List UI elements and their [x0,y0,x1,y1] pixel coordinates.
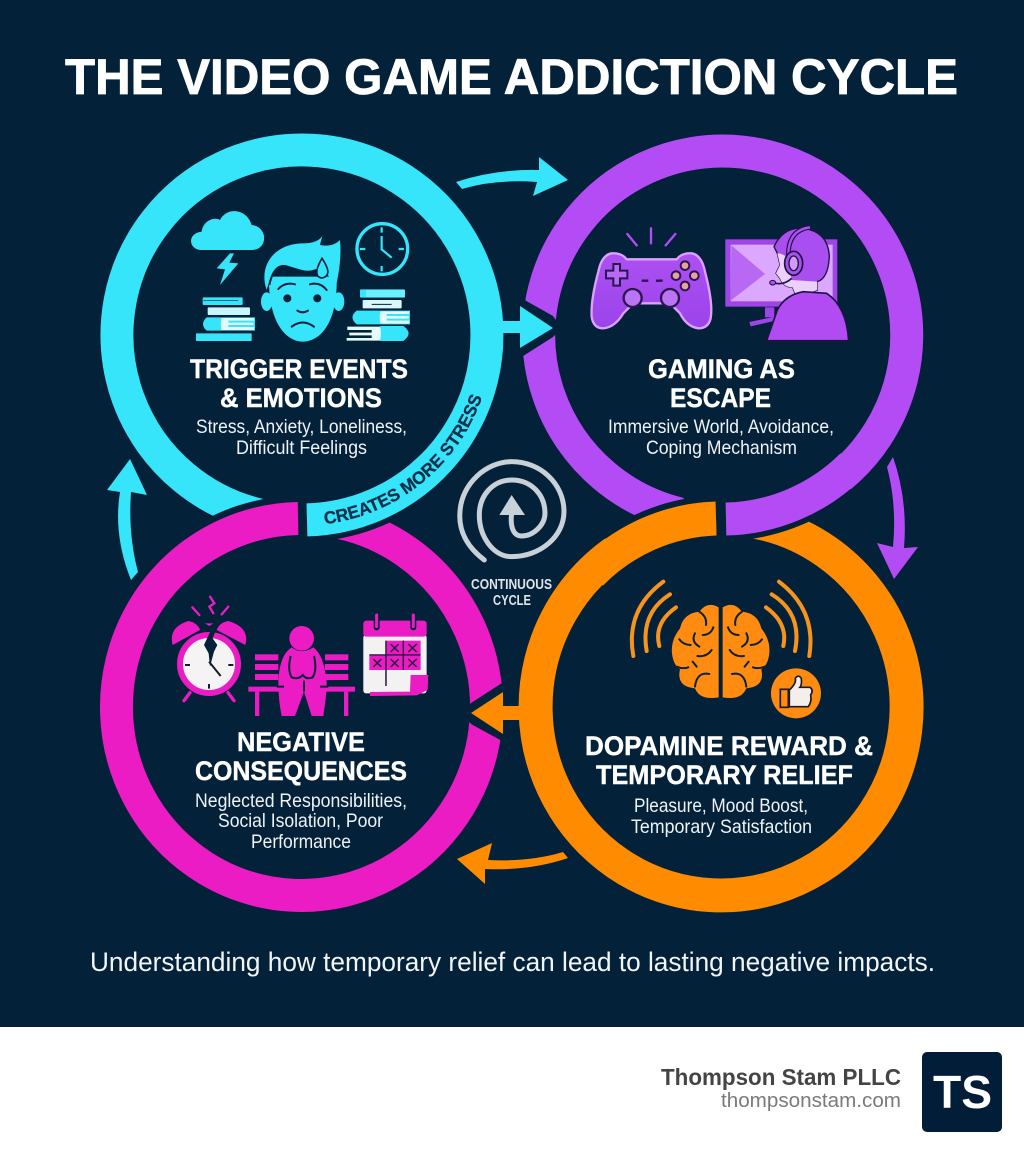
icon: spiral arrow [460,462,564,560]
description: Difficult Feelings [236,437,367,459]
heading: GAMING AS [648,354,795,384]
company name: Thompson Stam PLLC [661,1064,901,1090]
footer branding [661,1052,1002,1132]
description: Coping Mechanism [646,437,797,459]
logo [922,1052,1002,1132]
description [608,416,834,459]
heading [195,727,407,786]
arrow: left cyan [107,459,147,580]
title: THE VIDEO GAME ADDICTION CYCLE [65,49,958,105]
icon: controller and gamer at monitor [592,227,849,341]
arrow: bottom orange [457,843,568,884]
description: Neglected Responsibilities, [195,790,407,812]
description: Pleasure, Mood Boost, [634,795,808,817]
icon: stress face, storm, books, clock [191,211,410,342]
label: CONTINUOUS [471,577,552,593]
heading: CONSEQUENCES [195,756,407,786]
description: Performance [251,831,351,853]
heading [190,354,408,413]
logo: TS [933,1066,992,1118]
heading [648,354,795,413]
center: continuous cycle [460,462,564,609]
arrow: cyan to purple (center) [500,306,553,348]
arrow: top cyan [456,157,568,196]
heading: DOPAMINE REWARD & [585,731,873,761]
ring: cycle rings [116,150,907,895]
description: Immersive World, Avoidance, [608,416,834,438]
heading: & EMOTIONS [220,383,382,413]
description: Stress, Anxiety, Loneliness, [196,416,407,438]
heading: ESCAPE [670,383,771,413]
description [631,795,812,838]
curved label: creates more stress: CREATES MORE STRESS [324,394,482,524]
heading [585,731,873,790]
description [196,416,407,459]
arrow: right purple [877,457,918,579]
panel: negative consequences [172,597,428,853]
description: Social Isolation, Poor [218,810,383,832]
caption: Understanding how temporary relief can lead to lasting negative impacts. [90,947,935,977]
panel: gaming as escape [592,227,849,459]
description: Temporary Satisfaction [631,816,812,838]
icon: brain with signal waves and thumbs up [632,582,821,718]
icon: broken alarm, person on bench, calendar [172,597,428,716]
heading: TRIGGER EVENTS [190,354,408,384]
description [195,790,407,853]
footer band [0,1027,1024,1154]
heading: NEGATIVE [237,727,365,757]
website: thompsonstam.com [721,1090,901,1112]
heading: TEMPORARY RELIEF [596,760,853,790]
label: CYCLE [493,593,531,609]
label [471,577,552,609]
panel: dopamine reward and temporary relief [585,582,873,838]
arrow: orange to magenta (center) [471,692,524,734]
panel: trigger events and emotions [190,211,410,459]
